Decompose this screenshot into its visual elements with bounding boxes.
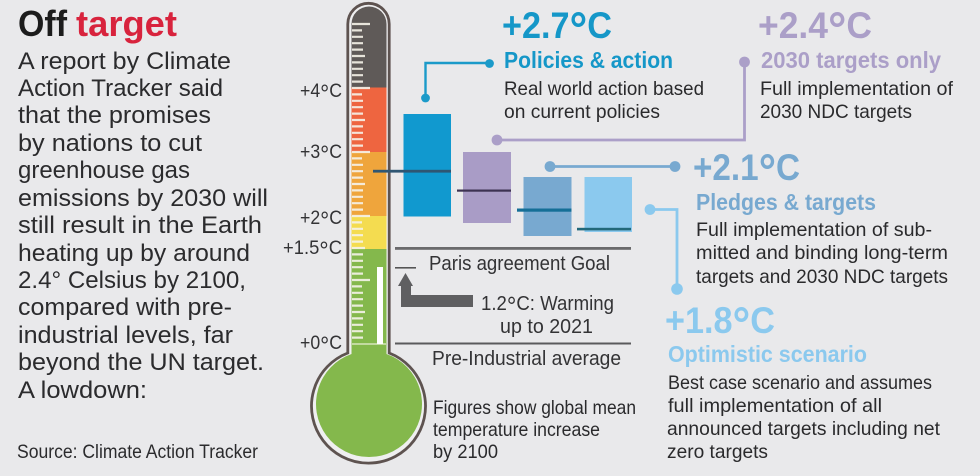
range bar: pledges and targets [517, 177, 572, 236]
connector: 2030 targets only [492, 57, 750, 145]
intro text block: 2.4° Celsius by 2100, [18, 267, 246, 294]
temperature scale labels: +2 [300, 207, 322, 229]
title: Off [18, 3, 68, 44]
connector: policies and action [421, 59, 494, 102]
title [18, 3, 177, 44]
callout: +1.8C optimistic scenario: +1.8 [665, 300, 738, 341]
range bar: policies and action [373, 114, 451, 216]
intro text block: that the promises [18, 102, 211, 129]
temperature scale labels: +0 [300, 332, 322, 354]
temperature scale labels: +1.5 [283, 237, 322, 259]
callout: +2.7C policies and action: ° [570, 4, 587, 57]
callout: +2.1C pledges and targets: +2.1 [693, 147, 766, 188]
temperature scale labels: ° [320, 332, 329, 360]
label: warming up to 2021: 1.2 [481, 292, 510, 315]
temperature scale labels: C [329, 237, 342, 259]
connector: pledges and targets [545, 161, 680, 172]
temperature scale labels: ° [320, 141, 329, 169]
callout: +2.4C 2030 targets only: 2030 targets only [761, 47, 941, 73]
temperature scale labels: ° [319, 237, 329, 265]
temperature scale labels: C [329, 80, 342, 102]
intro text block: compared with pre- [18, 294, 232, 321]
callout: +1.8C optimistic scenario: zero targets [667, 441, 768, 463]
intro text block [18, 48, 268, 404]
temperature scale labels [283, 80, 342, 360]
callout: +1.8C optimistic scenario: ° [733, 299, 750, 352]
connector: optimistic scenario [645, 204, 683, 295]
callout: +1.8C optimistic scenario [665, 299, 941, 463]
callout: +1.8C optimistic scenario: Optimistic scenario [668, 341, 867, 367]
note: figures: by 2100 [433, 441, 498, 463]
note: figures [433, 397, 636, 463]
label: warming up to 2021: up to 2021 [500, 315, 593, 338]
source note: Source: Climate Action Tracker [17, 442, 259, 463]
intro text block: Action Tracker said [18, 75, 223, 102]
callout: +2.1C pledges and targets: Pledges & targets [696, 189, 876, 215]
arrow: warming up to 2021 [395, 267, 473, 307]
callout: +2.1C pledges and targets: mitted and binding long-term [696, 242, 948, 264]
temperature scale labels: ° [320, 80, 329, 108]
callout: +1.8C optimistic scenario: Best case scenario and assumes [668, 372, 932, 394]
intro text block: beyond the UN target. [18, 349, 264, 376]
intro text block: emissions by 2030 will [18, 185, 268, 212]
callout: +2.4C 2030 targets only: ° [828, 4, 846, 57]
callout: +2.7C policies and action: Policies & action [504, 47, 673, 73]
intro text block: heating up by around [18, 240, 250, 267]
temperature scale labels: +3 [300, 141, 322, 163]
label: warming up to 2021: ° [507, 291, 516, 321]
temperature scale labels: C [329, 332, 342, 354]
callout: +2.1C pledges and targets: ° [759, 146, 776, 199]
range bar: optimistic scenario [577, 177, 632, 232]
intro text block: A report by Climate [18, 48, 231, 75]
title: target [76, 3, 177, 44]
callout: +2.7C policies and action [502, 4, 704, 123]
callout: +2.1C pledges and targets: Full implementation of sub- [696, 219, 932, 241]
callout: +2.1C pledges and targets: C [776, 147, 800, 188]
note: figures: temperature increase [433, 419, 600, 441]
thermometer tick marks [352, 24, 386, 344]
callout: +2.7C policies and action: on current policies [504, 101, 660, 123]
callout: +2.1C pledges and targets [693, 146, 948, 288]
label: warming up to 2021: C: Warming [516, 292, 614, 315]
callout: +1.8C optimistic scenario: announced targets including net [667, 418, 941, 440]
callout: +2.7C policies and action: Real world action based [504, 78, 704, 100]
intro text block: greenhouse gas [18, 157, 190, 184]
note: figures: Figures show global mean [433, 397, 636, 419]
intro text block: A lowdown: [18, 377, 147, 404]
warming-to-date white bar [377, 267, 383, 344]
intro text block: by nations to cut [18, 130, 202, 157]
callout: +2.4C 2030 targets only [758, 4, 954, 123]
Paris agreement line and label: Paris agreement Goal [429, 252, 610, 275]
pre-industrial line and label: Pre-Industrial average [432, 347, 621, 370]
callout: +2.4C 2030 targets only: 2030 NDC targets [760, 101, 912, 123]
callout: +2.1C pledges and targets: targets and 2030 NDC targets [696, 266, 948, 288]
callout: +2.4C 2030 targets only: C [846, 5, 872, 46]
intro text block: still result in the Earth [18, 212, 262, 239]
temperature scale labels: ° [320, 207, 329, 235]
callout: +1.8C optimistic scenario: C [750, 300, 775, 341]
callout: +2.4C 2030 targets only: Full implementation of [760, 78, 954, 100]
range bar: 2030 targets only [457, 152, 511, 223]
callout: +2.7C policies and action: C [587, 5, 612, 46]
temperature scale labels: C [329, 207, 342, 229]
label: warming up to 2021 [481, 291, 614, 338]
callout: +2.7C policies and action: +2.7 [502, 5, 575, 46]
temperature scale labels: +4 [300, 80, 322, 102]
callout: +1.8C optimistic scenario: full implementation of all [668, 395, 882, 417]
callout: +2.4C 2030 targets only: +2.4 [758, 5, 831, 46]
intro text block: industrial levels, far [18, 322, 233, 349]
thermometer [310, 2, 427, 464]
temperature scale labels: C [329, 141, 342, 163]
